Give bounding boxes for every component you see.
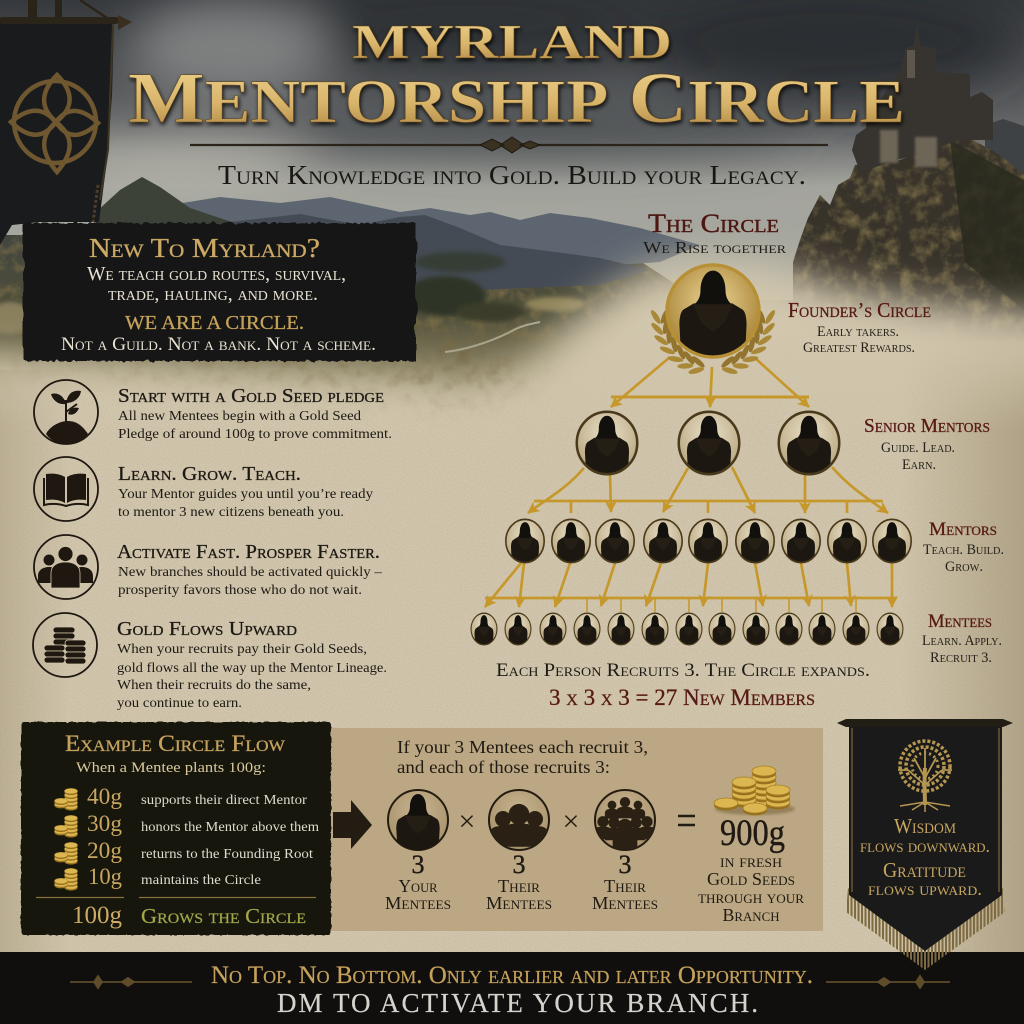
arrow: flow to multiplication: [333, 800, 372, 849]
column labels: Their: [498, 876, 540, 896]
row 20g: returns to the Founding Root: [141, 847, 313, 862]
flow heading: Example Circle Flow: [65, 731, 286, 756]
circle section heading: We Rise together: [643, 238, 786, 257]
multiply sign: ×: [563, 805, 579, 838]
panel text: trade, hauling, and more.: [108, 283, 318, 305]
multiplication intro text: [397, 737, 648, 777]
title line: Myrland: MYRLAND: [352, 14, 672, 69]
left hanging banner: [0, 0, 132, 245]
founder's circle label: [788, 298, 931, 356]
mentees row: [471, 613, 903, 646]
panel tagline: Not a Guild. Not a bank. Not a scheme.: [61, 334, 376, 355]
title line: Mentorship Circle: MENTORSHIP CIRCLE: [128, 58, 905, 138]
banner rod: [837, 719, 1013, 727]
icon: tree: [898, 741, 952, 812]
mentors label: [923, 519, 1004, 575]
row 30g: [54, 811, 319, 838]
icon: gold coin pile: [714, 766, 795, 815]
column labels: Their: [604, 876, 646, 896]
mountain with castle: [793, 25, 1024, 340]
step 3 text: prosperity favors those who do not wait.: [118, 583, 362, 598]
panel: example circle flow: [21, 722, 331, 935]
background: landscape sky and valley: [0, 0, 1024, 450]
right banner: [837, 719, 1013, 970]
senior mentors row: [577, 412, 839, 477]
banner text: flows downward.: [860, 836, 990, 856]
senior mentors label: [864, 415, 990, 473]
banner emblem: [11, 75, 98, 172]
column labels: 3: [618, 850, 632, 879]
column labels: [385, 850, 658, 913]
title divider ornament: [190, 137, 828, 153]
circle section heading: The Circle: [648, 209, 779, 238]
row 30g: 30g: [87, 811, 123, 836]
step 2 text: to mentor 3 new citizens beneath you.: [118, 505, 344, 520]
total row: [72, 902, 306, 929]
panel heading: New To Myrland?: [89, 233, 320, 263]
column labels: Mentees: [592, 893, 658, 913]
step 1 text: [118, 385, 392, 442]
circle summary text: Each Person Recruits 3. The Circle expands.: [496, 660, 870, 681]
icon: group of mentees: [594, 790, 656, 850]
step 4 text: Gold Flows Upward: [117, 618, 297, 640]
row 40g: [54, 784, 307, 811]
multiply sign: ×: [459, 805, 475, 838]
equals sign: [678, 816, 695, 825]
founder's circle label: Founder’s Circle: [788, 298, 931, 322]
panel: new to Myrland: [23, 223, 416, 361]
step 4 text: gold flows all the way up the Mentor Lineage.: [117, 661, 387, 676]
step 3 text: Activate Fast. Prosper Faster.: [117, 541, 380, 563]
row 40g: supports their direct Mentor: [141, 793, 307, 808]
step 2 text: [118, 463, 373, 520]
founder's circle label: Early takers.: [817, 324, 899, 340]
step 3 text: New branches should be activated quickly –: [118, 565, 383, 580]
mentors label: Teach. Build.: [923, 542, 1004, 558]
icon: three mentees: [489, 790, 549, 850]
payout caption: Branch: [722, 905, 780, 925]
circle summary text: 3 x 3 x 3 = 27 New Members: [549, 685, 815, 710]
payout result: 900g: [720, 813, 785, 854]
panel text: We teach gold routes, survival,: [87, 263, 346, 285]
step 2 text: Learn. Grow. Teach.: [118, 463, 301, 485]
mentees label: Learn. Apply.: [922, 633, 1002, 649]
senior mentors label: Senior Mentors: [864, 415, 990, 437]
step 2 text: Your Mentor guides you until you’re ready: [118, 487, 373, 502]
parchment background: [0, 261, 1024, 1024]
right ornament: [826, 976, 950, 988]
step 1 text: All new Mentees begin with a Gold Seed: [118, 409, 361, 424]
bottom bar: [0, 952, 1024, 1024]
senior mentors label: Guide. Lead.: [881, 440, 955, 456]
title: [128, 14, 905, 138]
column labels: Mentees: [486, 893, 552, 913]
column labels: Your: [398, 876, 438, 896]
column labels: 3: [412, 850, 424, 879]
icon: coin stacks: [33, 613, 97, 677]
icon: open book: [34, 457, 98, 521]
icon: three people: [34, 535, 98, 599]
mentors label: Mentors: [929, 519, 997, 540]
banner fringe: [846, 888, 1005, 970]
total row: Grows the Circle: [141, 904, 306, 928]
mentees label: Mentees: [928, 611, 992, 632]
payout caption: through your: [698, 887, 804, 907]
row 10g: [54, 864, 261, 891]
mentees label: [922, 611, 1002, 666]
row 20g: 20g: [87, 838, 123, 863]
footer tagline: No Top. No Bottom. Only earlier and later Opportunity.: [211, 962, 813, 989]
circle summary text: [496, 660, 870, 710]
step 3 text: [117, 541, 383, 598]
step list: [33, 380, 392, 711]
founder medallion with laurel: [649, 265, 777, 378]
tan panel: branch multiplication: [331, 728, 823, 931]
row 20g: [54, 838, 313, 865]
panel text: [87, 263, 346, 305]
mentors row: [506, 519, 911, 564]
column labels: 3: [512, 850, 526, 879]
payout caption: [698, 851, 804, 925]
banner text: flows upward.: [868, 879, 982, 899]
banner text: Gratitude: [883, 858, 966, 882]
founder's circle label: Greatest Rewards.: [803, 340, 915, 356]
row 30g: honors the Mentor above them: [141, 820, 319, 835]
step 1 text: Start with a Gold Seed pledge: [118, 385, 384, 407]
banner cloth: [849, 726, 1002, 951]
mentees label: Recruit 3.: [930, 650, 992, 666]
multiplication intro text: If your 3 Mentees each recruit 3,: [397, 737, 648, 757]
banner text: [860, 814, 990, 899]
column labels: Mentees: [385, 893, 451, 913]
panel subheading: WE ARE A CIRCLE.: [125, 312, 304, 334]
row 10g: maintains the Circle: [141, 873, 261, 888]
row 10g: 10g: [88, 864, 122, 889]
step 1 text: Pledge of around 100g to prove commitment.: [118, 427, 392, 442]
step 4 text: you continue to earn.: [117, 696, 242, 711]
payout caption: in fresh: [720, 851, 782, 871]
icon: one hooded mentee: [388, 790, 448, 852]
mentors label: Grow.: [945, 559, 983, 575]
row 40g: 40g: [87, 784, 123, 809]
call to action: DM TO ACTIVATE YOUR BRANCH.: [277, 988, 758, 1018]
total row: 100g: [72, 902, 122, 929]
circle section heading: [643, 209, 786, 257]
flow subheading: When a Mentee plants 100g:: [76, 760, 266, 776]
left ornament: [70, 976, 192, 988]
banner text: Wisdom: [894, 814, 956, 838]
arrows: hierarchy connectors: [485, 357, 897, 612]
subtitle: Turn Knowledge into Gold. Build your Legacy.: [218, 160, 806, 190]
step 4 text: When your recruits pay their Gold Seeds,: [117, 642, 367, 657]
multiplication intro text: and each of those recruits 3:: [397, 757, 610, 777]
step 4 text: When their recruits do the same,: [117, 678, 311, 693]
icon: seedling: [34, 380, 98, 444]
payout caption: Gold Seeds: [707, 869, 795, 889]
step 4 text: [117, 618, 387, 711]
senior mentors label: Earn.: [902, 457, 936, 473]
